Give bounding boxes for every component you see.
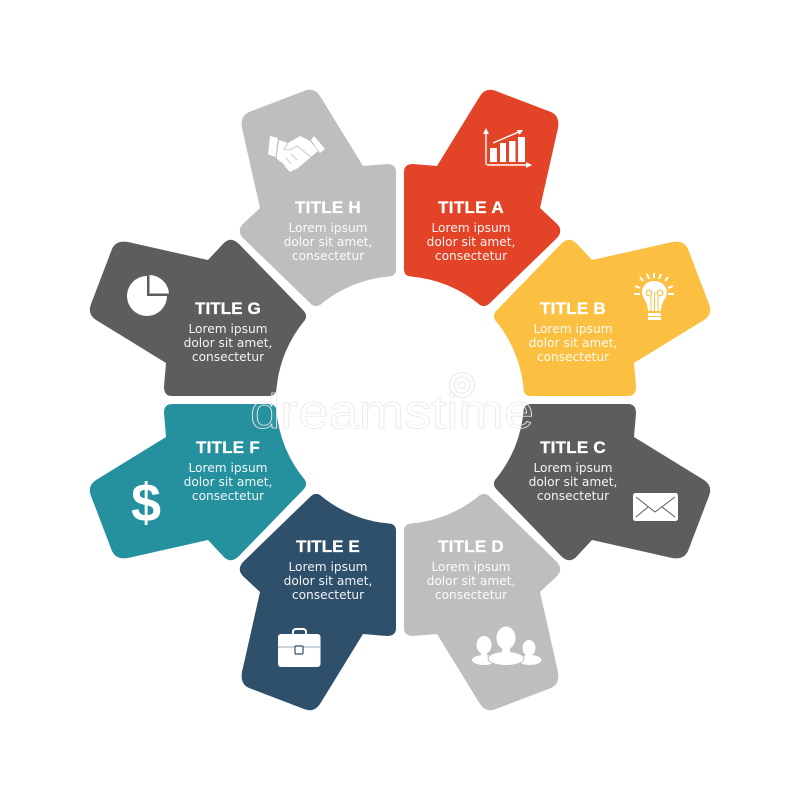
heading: Title B: TITLE B <box>540 299 606 318</box>
panel: Title C <box>494 404 710 560</box>
heading: Title E: TITLE E <box>296 537 360 556</box>
text block: Title G body: dolor sit amet, <box>184 336 272 350</box>
text block: Title E body: dolor sit amet, <box>284 574 372 588</box>
text block: Title D body: Lorem ipsum <box>431 560 511 574</box>
panel: Title B <box>494 240 710 396</box>
shape: teal arrow segment <box>90 404 306 560</box>
text block: Title F body: dolor sit amet, <box>184 475 272 489</box>
watermark <box>250 372 534 439</box>
heading: Title F: TITLE F <box>196 438 260 457</box>
text block: Title C body: consectetur <box>537 489 610 503</box>
watermark: wordmark: dreamstime <box>250 386 534 439</box>
text block: Title B body: dolor sit amet, <box>529 336 617 350</box>
text block: Title D body: dolor sit amet, <box>427 574 515 588</box>
heading: Title A: TITLE A <box>438 198 504 217</box>
text block: Title H body: consectetur <box>292 249 365 263</box>
shape: light grey arrow segment <box>240 90 396 306</box>
panel: Title E <box>240 494 396 710</box>
icon: pie chart <box>127 275 169 316</box>
icon: envelope <box>633 493 678 521</box>
text block: Title C body: Lorem ipsum <box>533 461 613 475</box>
shape: dark grey arrow segment <box>90 240 306 396</box>
panel: Title H <box>240 90 396 306</box>
heading: Title G: TITLE G <box>195 299 261 318</box>
shape: red arrow segment <box>404 90 560 306</box>
panel: Title D <box>404 494 560 710</box>
heading: Title D: TITLE D <box>438 537 504 556</box>
text block: Title A body: Lorem ipsum <box>431 221 511 235</box>
text block: Title B body: Lorem ipsum <box>533 322 613 336</box>
text block: Title D body: consectetur <box>435 588 508 602</box>
icon: handshake <box>268 136 325 172</box>
panel: Title A <box>404 90 560 306</box>
icon: dollar sign: $ <box>131 473 161 533</box>
text block: Title B body: consectetur <box>537 350 610 364</box>
text block: Title G body: Lorem ipsum <box>188 322 268 336</box>
text block: Title C body: dolor sit amet, <box>529 475 617 489</box>
text block: Title F body: Lorem ipsum <box>188 461 268 475</box>
text block: Title A body: consectetur <box>435 249 508 263</box>
text block: Title G body: consectetur <box>192 350 265 364</box>
text block: Title E body: consectetur <box>292 588 365 602</box>
text block: Title E body: Lorem ipsum <box>288 560 368 574</box>
shape: dark grey arrow segment <box>494 404 710 560</box>
icon: light bulb <box>634 273 674 320</box>
icon: briefcase <box>278 629 320 667</box>
text block: Title A body: dolor sit amet, <box>427 235 515 249</box>
icon: rising bar chart <box>483 128 532 168</box>
text block: Title F body: consectetur <box>192 489 265 503</box>
text block: Title H body: Lorem ipsum <box>288 221 368 235</box>
watermark: spiral logo <box>450 372 474 398</box>
panel: Title G <box>90 240 306 396</box>
text block: Title H body: dolor sit amet, <box>284 235 372 249</box>
shape: yellow arrow segment <box>494 240 710 396</box>
heading: Title C: TITLE C <box>540 438 606 457</box>
shape: navy arrow segment <box>240 494 396 710</box>
heading: Title H: TITLE H <box>295 198 361 217</box>
shape: light grey arrow segment <box>404 494 560 710</box>
panel: Title F <box>90 404 306 560</box>
icon: group of people <box>472 626 542 666</box>
